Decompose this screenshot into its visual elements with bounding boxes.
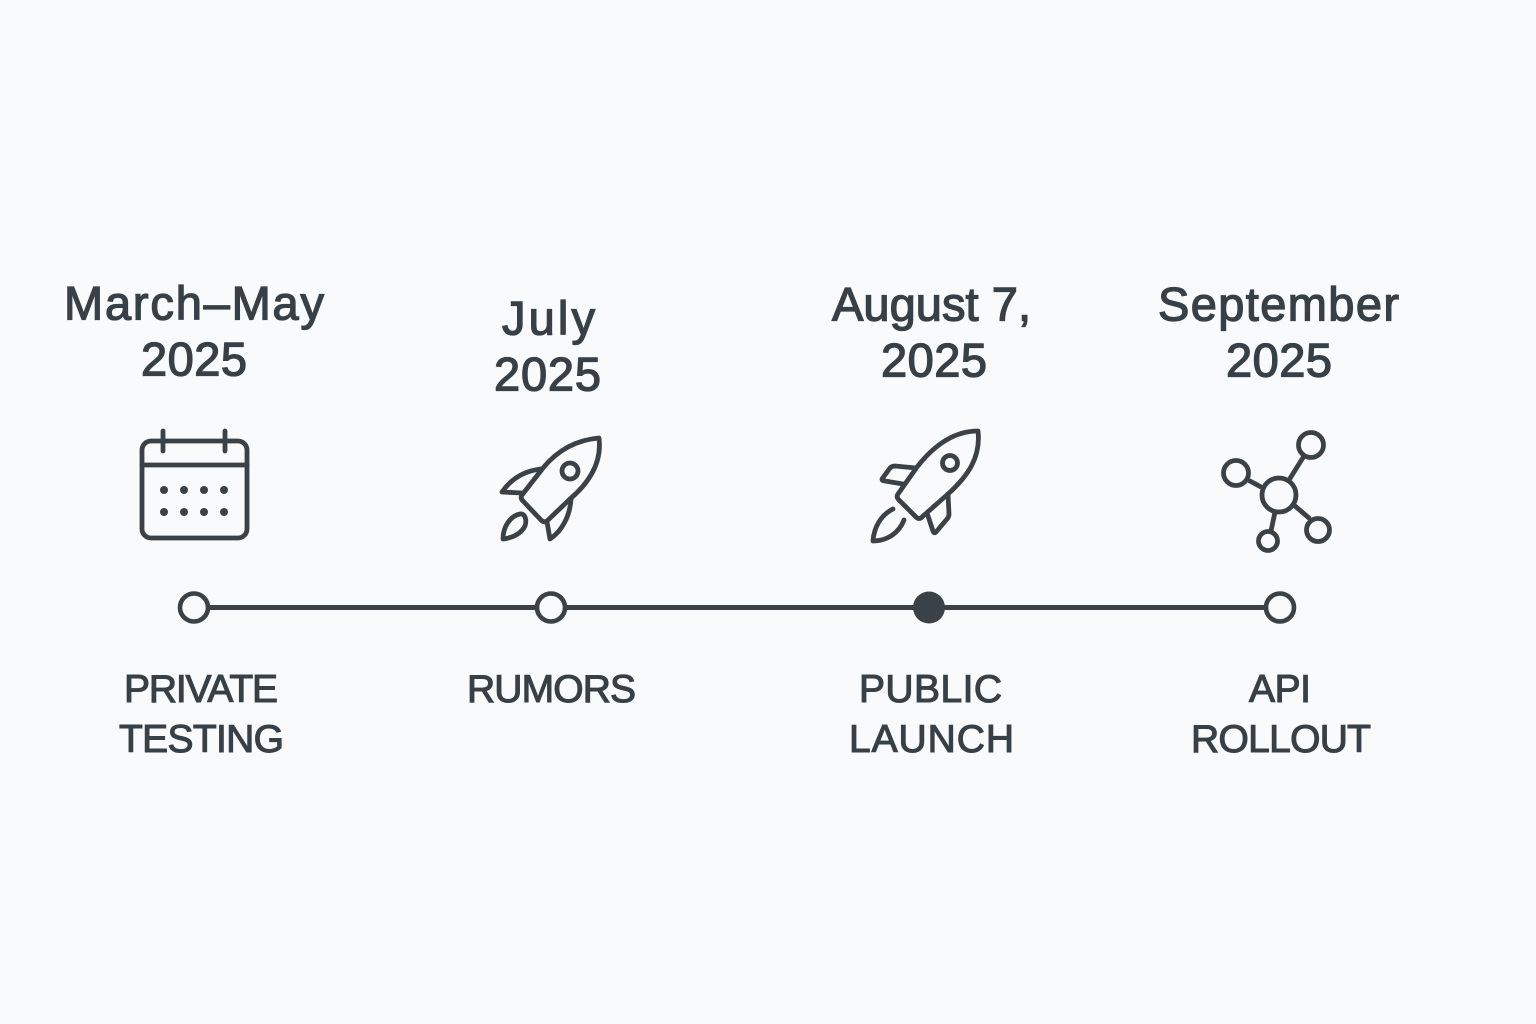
date heading: September 2025: September (1158, 278, 1399, 330)
label: API rollout (1191, 668, 1371, 761)
icon: rocket (public launch) (873, 431, 978, 541)
date heading: March–May 2025 (64, 276, 324, 386)
label: private testing (119, 668, 284, 761)
icon: network nodes (1224, 432, 1330, 550)
label: rumors: RUMORS (467, 668, 636, 711)
date heading: March–May 2025: March–May (64, 276, 324, 330)
label: public launch: PUBLIC (859, 668, 1002, 711)
date heading: July 2025: July (502, 292, 596, 344)
date heading: August 7, 2025: August 7, (832, 278, 1031, 330)
icon: calendar (142, 431, 247, 538)
milestone marker: private testing (180, 594, 208, 622)
date heading: August 7, 2025: 2025 (881, 334, 987, 386)
label: API rollout: API (1249, 668, 1311, 711)
date heading: September 2025: 2025 (1226, 334, 1332, 386)
date heading: September 2025 (1158, 278, 1399, 386)
date heading: July 2025: 2025 (494, 348, 601, 400)
date heading: March–May 2025: 2025 (141, 332, 247, 386)
label: private testing: PRIVATE (124, 668, 278, 711)
milestone marker: API rollout (1266, 594, 1294, 622)
timeline line (194, 605, 1280, 610)
date heading: July 2025 (494, 292, 601, 400)
label: API rollout: ROLLOUT (1191, 718, 1371, 761)
milestone marker: public launch (filled) (913, 592, 945, 624)
milestone marker: rumors (537, 594, 565, 622)
label: public launch: LAUNCH (849, 718, 1014, 761)
icon: rocket (rumors) (502, 438, 599, 539)
date heading: August 7, 2025 (832, 278, 1031, 386)
label: private testing: TESTING (119, 718, 284, 761)
label: public launch (849, 668, 1014, 761)
